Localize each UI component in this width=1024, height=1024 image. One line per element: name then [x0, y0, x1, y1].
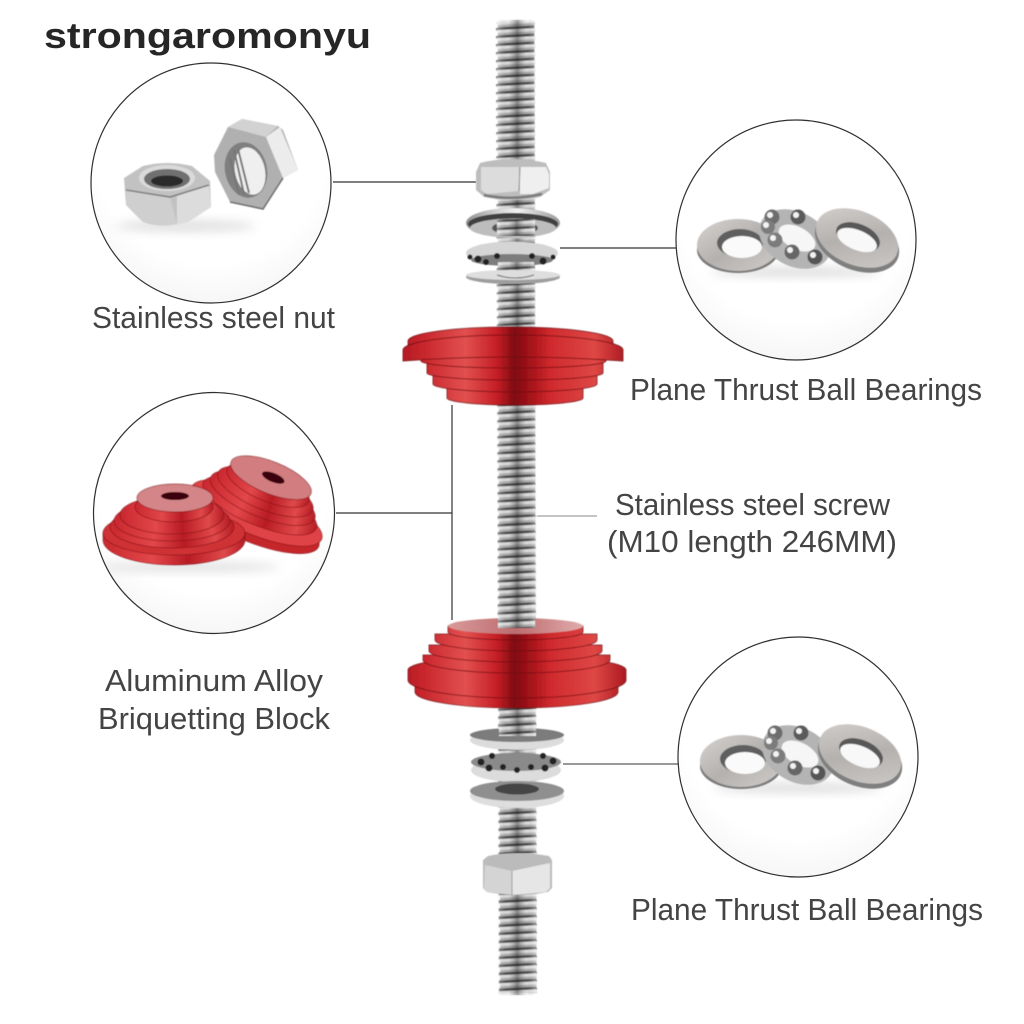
label: aluminum alloy briquetting block: Aluminum Alloy: [105, 663, 324, 698]
ball cage: [471, 753, 561, 782]
left block: [103, 484, 245, 565]
label: stainless steel screw: (M10 length 246MM): [607, 524, 897, 559]
bottom nut: [483, 853, 552, 895]
label: plane thrust ball bearings bottom: Plane Thrust Ball Bearings: [631, 892, 983, 927]
icon: hex nuts: [115, 119, 298, 232]
top nut: [476, 159, 550, 200]
leader lines: [333, 182, 678, 764]
ball cage: [466, 242, 558, 271]
callout: aluminum alloy block: [94, 392, 342, 634]
title: strongaromonyu: [44, 15, 371, 56]
upright nut: [214, 119, 298, 209]
lying nut: [124, 163, 211, 226]
icon: thrust bearing: [700, 713, 911, 800]
upper washer: [466, 208, 560, 238]
bottom red block: [408, 605, 626, 708]
top red block: [403, 327, 623, 405]
label: stainless steel screw: Stainless steel screw: [615, 487, 891, 522]
bottom bearing set: [470, 722, 564, 808]
callout: bearing top: [676, 120, 916, 360]
label: plane thrust ball bearings top: Plane Thrust Ball Bearings: [630, 372, 982, 407]
icon: thrust bearing: [697, 197, 908, 284]
top bearing set: [466, 208, 560, 284]
callout: bearing bottom: [678, 637, 918, 877]
lower washer: [470, 781, 564, 808]
label: aluminum alloy briquetting block: Briquetting Block: [98, 701, 330, 736]
right block: [192, 454, 324, 555]
callout: stainless steel nut: [91, 63, 331, 303]
screw: [496, 20, 538, 995]
icon: red stacked blocks: [102, 454, 324, 575]
upper washer: [470, 722, 564, 750]
label: aluminum alloy briquetting block: [98, 663, 330, 736]
label: stainless steel screw: [607, 487, 897, 559]
lower washer: [466, 270, 560, 284]
label: stainless steel nut: Stainless steel nut: [92, 300, 335, 335]
